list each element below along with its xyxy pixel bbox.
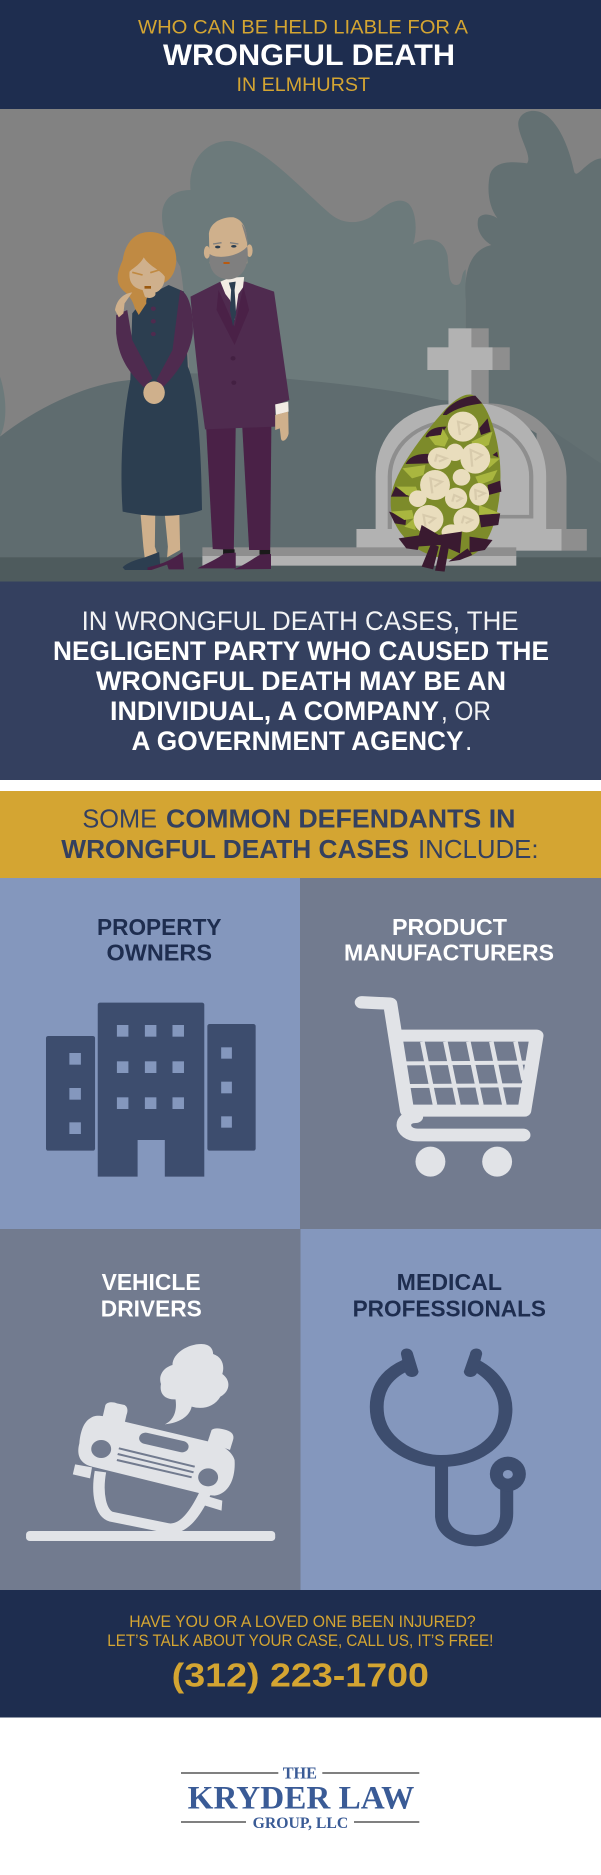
phone number: (312) 223-1700 — [172, 1657, 429, 1694]
intro line 2: NEGLIGENT PARTY WHO CAUSED THE — [53, 636, 549, 666]
panel: product manufacturers: PRODUCT — [392, 914, 507, 940]
icon: buildings — [46, 1003, 256, 1177]
call to action text: HAVE YOU OR A LOVED ONE BEEN INJURED? — [129, 1613, 476, 1631]
background tree left — [162, 141, 466, 417]
illustration: mourning couple at a grave — [0, 109, 601, 582]
intro line 5: A GOVERNMENT AGENCY — [132, 726, 464, 756]
logo: THE — [283, 1764, 317, 1783]
intro line 4: , OR — [441, 696, 491, 726]
panel: product manufacturers — [300, 878, 601, 1229]
title line 3: IN ELMHURST — [236, 75, 370, 96]
yellow section heading: SOME — [82, 806, 157, 834]
panel: vehicle drivers — [0, 1229, 300, 1590]
panel: property owners — [0, 878, 300, 1229]
intro line 1: IN WRONGFUL DEATH CASES, THE — [82, 606, 519, 636]
icon: shopping cart — [362, 1002, 537, 1177]
woman — [115, 232, 202, 570]
panel: product manufacturers: MANUFACTURERS — [344, 940, 554, 966]
panel: medical professionals: MEDICAL — [397, 1269, 502, 1295]
logo: GROUP, LLC — [253, 1815, 348, 1832]
intro line 3: WRONGFUL DEATH MAY BE AN — [96, 666, 506, 696]
yellow section heading: WRONGFUL DEATH CASES — [61, 836, 409, 864]
panel: property owners: PROPERTY — [97, 914, 222, 940]
logo — [181, 1764, 419, 1832]
panel: medical professionals — [300, 1229, 601, 1590]
icon: overturned car — [26, 1344, 275, 1541]
panel: property owners: OWNERS — [106, 940, 212, 966]
wreath leaves — [391, 428, 500, 530]
header panel — [0, 0, 601, 110]
yellow section heading — [0, 791, 601, 878]
intro line 5: . — [465, 726, 472, 756]
panel: vehicle drivers: VEHICLE — [102, 1269, 201, 1295]
panel: medical professionals: PROFESSIONALS — [353, 1296, 546, 1322]
yellow section heading: INCLUDE: — [418, 836, 538, 864]
hill — [0, 373, 601, 567]
yellow section heading: COMMON DEFENDANTS IN — [166, 806, 516, 834]
call to action panel — [0, 1590, 601, 1718]
background tree right — [465, 111, 601, 467]
logo: KRYDER LAW — [188, 1780, 414, 1816]
wreath bow — [416, 525, 462, 572]
panel: vehicle drivers: DRIVERS — [101, 1296, 202, 1322]
call to action panel: LET’S TALK ABOUT YOUR CASE, CALL US, IT’S FREE! — [107, 1632, 493, 1650]
intro line 4: INDIVIDUAL, A COMPANY — [110, 696, 439, 726]
title line 1: WHO CAN BE HELD LIABLE FOR A — [138, 17, 468, 38]
ground — [0, 557, 601, 582]
icon: stethoscope — [377, 1348, 526, 1541]
wreath roses — [409, 412, 490, 540]
funeral wreath — [389, 394, 501, 572]
title line 2: WRONGFUL DEATH — [163, 39, 455, 72]
small tree left edge — [0, 377, 5, 437]
small bush — [392, 379, 441, 393]
intro panel — [0, 582, 601, 780]
gravestone — [202, 328, 587, 566]
wreath ribbon bands — [389, 396, 501, 562]
man — [190, 217, 289, 569]
